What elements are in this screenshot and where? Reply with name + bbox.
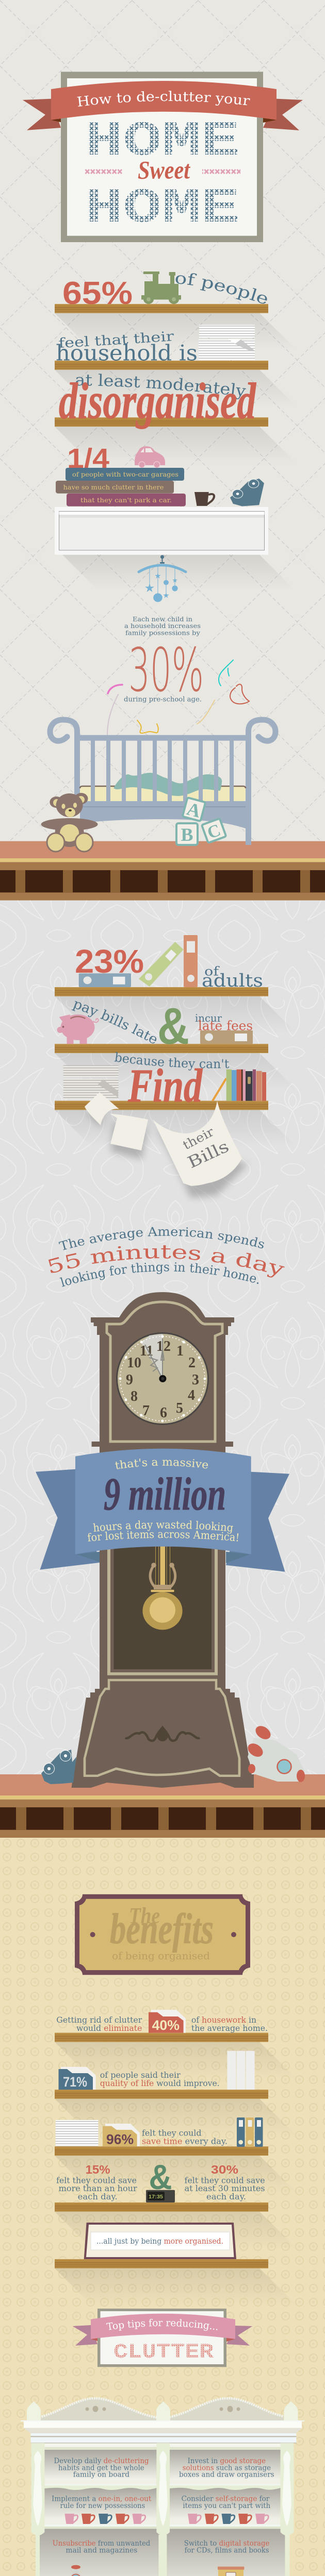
text: their bills	[181, 1124, 232, 1172]
benefit row: 15 and 30 percent: more than an hour	[59, 2183, 137, 2193]
ribbon tails	[23, 99, 303, 130]
crib slats	[91, 740, 234, 801]
cross stitch word: home second: HOME	[84, 181, 240, 236]
text: each new child	[124, 615, 201, 637]
tip: self storage: items you can't part with	[183, 2502, 270, 2510]
cross stitch word: clutter: CLUTTER	[113, 2341, 214, 2364]
clock upper trim	[107, 1302, 222, 1442]
white binders	[227, 2051, 255, 2090]
book stack with text	[56, 468, 186, 506]
text: their bills: their	[181, 1124, 217, 1153]
crib lower panel	[80, 801, 246, 828]
icon: pink toy car	[135, 446, 165, 468]
paper shadows	[85, 1110, 248, 1198]
icon: baby mobile: ★	[163, 591, 169, 599]
tip: daily habits: Develop daily de-cluttering	[54, 2457, 149, 2465]
icon: row of books	[226, 1070, 266, 1101]
icon: teddy bear	[41, 793, 98, 852]
tip: one in one out: Implement a one-in, one-out	[52, 2495, 152, 2503]
clock numerals: 10	[127, 1355, 141, 1371]
framed message: ...all just by being more organised.	[96, 2238, 223, 2246]
paper three	[153, 1101, 242, 1186]
binder: orange upright	[184, 935, 198, 987]
stat: 23%: 23%	[75, 943, 144, 980]
curved text: pay bills late: pay bills late	[71, 1001, 157, 1044]
ribbon text: Top tips for reducing...	[106, 2318, 218, 2331]
curved text: of people: of people	[175, 273, 267, 304]
arc heading: 55 minutes a day: 55 minutes a day	[48, 1245, 285, 1278]
plaque text: benefits: benefits	[110, 1905, 214, 1953]
tip: self storage	[182, 2495, 270, 2510]
icon: baby mobile	[139, 555, 186, 602]
text: each new child: family possessions by	[125, 629, 201, 637]
icon: toy car behind clock	[41, 1750, 76, 1784]
icon: baby mobile: ★	[172, 578, 177, 584]
clock numerals: 1	[176, 1343, 184, 1359]
clock numerals: 11	[140, 1343, 153, 1359]
mugs row left	[64, 2514, 145, 2524]
icon: storage boxes photos	[208, 2567, 254, 2576]
benefit row: 40 percent: Getting rid of clutter	[56, 2015, 142, 2025]
cross stitch word: home: HOME	[84, 114, 240, 170]
wooden shelves top group	[55, 304, 297, 464]
text: hours a day: hours a day wasted looking	[93, 1520, 233, 1534]
text: household is: household is	[56, 340, 198, 365]
benefit row: 40 percent: would eliminate	[76, 2023, 142, 2033]
icon: brown mug	[194, 492, 214, 506]
benefit row: 15 and 30 percent: 15%	[86, 2163, 110, 2176]
title sampler frame	[23, 72, 303, 242]
script word: sweet: Sweet	[138, 156, 191, 184]
finials	[27, 2401, 298, 2420]
clock hands	[145, 1338, 164, 1379]
benefit row: 96 percent: felt they could	[142, 2128, 201, 2138]
folder 40%: 40%	[152, 2018, 180, 2033]
binder: green tilted	[139, 942, 184, 987]
text: each new child: a household increases	[124, 622, 201, 630]
benefit row: 71 percent	[59, 2051, 255, 2090]
tip: one in one out	[52, 2495, 152, 2510]
toy blocks abc	[176, 798, 226, 845]
benefit row: 15 and 30 percent: felt they could save	[185, 2175, 265, 2185]
tip: self storage: Consider self-storage for	[182, 2495, 270, 2503]
book: blue: of people with two-car garages	[72, 471, 178, 478]
floor section one	[0, 841, 325, 901]
text: of adults: of	[204, 964, 220, 978]
columns	[31, 2443, 294, 2576]
binder: tan lying	[200, 1030, 253, 1044]
mugs row right	[188, 2514, 268, 2524]
clock numerals: 6	[160, 1405, 167, 1421]
binder: blue lying	[79, 973, 131, 987]
plaque text: of being organised: of being organised	[112, 1950, 210, 1962]
pink ribbon tails	[73, 2325, 252, 2346]
dresser cabinet	[21, 2398, 304, 2576]
text: of adults	[202, 964, 263, 991]
tip: unsubscribe	[53, 2539, 150, 2554]
tip: good storage: solutions such as storage	[183, 2464, 271, 2472]
text: for lost items: for lost items across America!	[88, 1531, 238, 1541]
falling papers with text	[85, 1092, 248, 1198]
book: plum	[67, 494, 186, 506]
clock ornament	[125, 1727, 200, 1741]
crib left post and curl	[50, 720, 77, 796]
grandfather clock	[72, 1292, 254, 1788]
ribbon title text: How to de-clutter your	[77, 91, 250, 107]
tip: good storage: Invest in good storage	[188, 2457, 266, 2465]
benefit row: 71 percent: quality of life would improve.	[100, 2078, 220, 2088]
upright binders	[237, 2117, 263, 2147]
tip: daily habits	[54, 2457, 149, 2479]
balusters	[33, 2451, 291, 2526]
text: that's a massive: that's a massive	[115, 1459, 208, 1469]
banner tails	[36, 1469, 289, 1572]
icon: pencil	[213, 1078, 226, 1101]
stat: 65%: 65%	[62, 276, 133, 311]
text: feel that their: feel that their	[59, 332, 174, 348]
book: brown: have so much clutter in there	[63, 484, 164, 491]
benefit row: 96 percent	[56, 2117, 263, 2147]
script word: find: Find	[127, 1059, 203, 1112]
icon: digital clock: 17:35	[149, 2194, 163, 2200]
stitched divider right	[202, 169, 240, 174]
tip: unsubscribe: Unsubscribe from unwanted	[53, 2539, 150, 2548]
white shelf box	[55, 507, 295, 590]
crib mattress	[80, 786, 246, 801]
clock numerals: 9	[126, 1372, 133, 1388]
clock numerals: 8	[131, 1388, 138, 1404]
text: incur: incur	[195, 1012, 222, 1024]
crib top rail	[80, 735, 246, 741]
wooden shelves lower group	[55, 2033, 297, 2306]
block a: A	[185, 798, 203, 822]
benefit row: 96 percent: save time every day.	[142, 2137, 228, 2146]
banner main	[75, 1449, 251, 1554]
tip: good storage: boxes and draw organisers	[179, 2471, 274, 2479]
clock numerals: 12	[156, 1338, 171, 1354]
clock base over floor	[72, 1774, 254, 1788]
floor section two	[0, 1774, 325, 1838]
book: brown	[56, 481, 174, 494]
folder 96%: 96%	[106, 2132, 134, 2147]
icon: baby mobile: ★	[145, 583, 154, 594]
folder 71%	[59, 2067, 96, 2090]
clock door panel	[107, 1546, 218, 1675]
upper valances	[44, 2443, 281, 2529]
text: of adults: adults	[202, 971, 263, 991]
stitched divider left	[85, 169, 123, 174]
framed message	[84, 2223, 236, 2259]
title ribbon	[51, 81, 277, 120]
tip: digital storage: Switch to digital storage	[184, 2539, 269, 2548]
tip: daily habits: family on board	[73, 2471, 129, 2479]
benefit row: 15 and 30 percent: at least 30 minutes	[185, 2183, 265, 2193]
crib right post and curl	[249, 720, 275, 845]
arc heading: looking for things: looking for things in their home.	[60, 1262, 258, 1287]
book: blue	[66, 468, 184, 481]
arc heading: the average american spends: The average American spends	[59, 1227, 264, 1250]
icon: digital clock	[146, 2190, 175, 2202]
folder 40%	[149, 2010, 186, 2033]
tip: one in one out: rule for new possessions	[60, 2502, 145, 2510]
background: nursery wall	[0, 0, 325, 845]
background: cream wallpaper	[0, 1838, 325, 2576]
icon: baby mobile: ★	[155, 572, 161, 580]
book: plum: that they can't park a car.	[80, 497, 172, 504]
text: at least moderately: at least moderately	[76, 374, 246, 399]
benefit row: 15 and 30 percent: each day.	[78, 2192, 118, 2201]
block c: C	[205, 821, 223, 843]
dresser pediment	[27, 2398, 298, 2420]
tip: good storage	[179, 2457, 274, 2479]
block b: B	[181, 824, 193, 845]
crib leg over floor	[246, 837, 251, 845]
icon: piggy bank	[57, 1014, 99, 1044]
benefit row: 15 and 30 percent: 30%	[211, 2163, 238, 2176]
icon: overturned blue car	[230, 479, 264, 506]
clock body	[72, 1292, 254, 1788]
benefit row: 15 and 30 percent	[56, 2158, 265, 2202]
pink ribbon	[91, 2314, 235, 2339]
paper two	[110, 1114, 148, 1150]
clock numerals: 2	[188, 1355, 196, 1371]
clock numerals: 7	[142, 1403, 150, 1419]
clock lower trim	[85, 1680, 239, 1776]
script: 9 million: 9 million	[104, 1469, 226, 1520]
dresser cornice	[21, 2420, 304, 2443]
background: damask wallpaper	[0, 901, 325, 1774]
benefits plaque	[75, 1894, 250, 1975]
tip: unsubscribe: mail and magazines	[66, 2546, 137, 2554]
text: because they can't: because they can't	[115, 1052, 229, 1071]
wooden shelves middle group	[55, 987, 297, 1147]
benefit row: 15 and 30 percent: felt they could save	[56, 2175, 137, 2185]
stat: 30% hand drawn: 30%	[128, 636, 204, 705]
folder 96%	[103, 2124, 140, 2147]
tip: daily habits: habits and get the whole	[58, 2464, 144, 2472]
benefit row: 71 percent: of people said their	[100, 2070, 181, 2080]
clock face	[116, 1332, 209, 1425]
folder 71%: 71%	[63, 2074, 87, 2090]
shelf backs	[39, 2450, 285, 2576]
icon: paper stack	[199, 325, 255, 360]
ampersand: &	[149, 2158, 172, 2197]
blue ribbon banner	[36, 1449, 289, 1572]
icon: rocket	[59, 2565, 93, 2576]
benefit row: 40 percent: of housework in	[191, 2015, 256, 2025]
tip: digital storage: for CDs, films and books	[185, 2546, 269, 2554]
crayon scribbles	[107, 660, 249, 735]
script word: disorganised: disorganised	[59, 372, 256, 430]
stat: one quarter: 1/4	[67, 443, 109, 474]
icon: toy rocket on floor	[246, 1723, 305, 1782]
icon: paper stack	[63, 1065, 119, 1099]
text: during pre-school age: during pre-school age.	[124, 696, 202, 704]
trim base	[85, 1758, 239, 1776]
icon: toy train	[141, 272, 181, 304]
clock numerals: 3	[192, 1372, 199, 1388]
benefit row: 40 percent	[56, 2010, 268, 2033]
clock numerals	[126, 1338, 199, 1421]
clock numerals: 4	[188, 1387, 195, 1403]
crib	[50, 720, 275, 845]
plaque text: the: The	[129, 1903, 160, 1928]
text: each new child: Each new child in	[133, 615, 192, 623]
text: their bills: Bills	[185, 1137, 232, 1172]
paper stack	[56, 2120, 98, 2146]
top tips heading	[72, 2309, 253, 2367]
clock numerals: 5	[176, 1400, 183, 1416]
pendulum	[142, 1546, 183, 1630]
benefit row: 40 percent: the average home.	[191, 2023, 268, 2033]
ampersand: &	[157, 997, 189, 1055]
benefit row: 15 and 30 percent: each day.	[206, 2192, 246, 2201]
crib blanket	[113, 773, 222, 796]
text: late fees: late fees	[198, 1018, 253, 1033]
tip: digital storage	[184, 2539, 269, 2554]
paper one	[85, 1092, 119, 1125]
